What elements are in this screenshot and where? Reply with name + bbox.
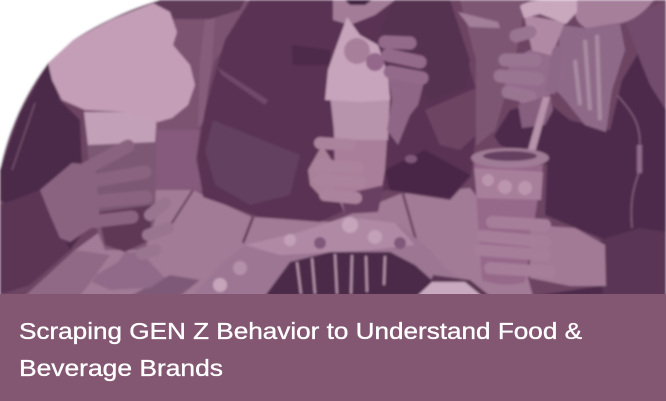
centre hands	[308, 42, 425, 198]
centre person hair and chin	[333, 0, 470, 100]
left milkshake glass	[84, 112, 165, 290]
title panel	[0, 294, 666, 401]
right person hair, neck, face	[556, 0, 666, 132]
white rounded corner mask	[0, 0, 160, 170]
table	[25, 188, 533, 296]
right drink with straw	[471, 97, 550, 285]
photo: friends eating desserts, purple duotone	[0, 0, 666, 296]
cotton candy	[48, 3, 195, 122]
ice cream cone and hand	[500, 0, 577, 128]
title text: Scraping GEN Z Behavior to Understand Food &	[19, 318, 582, 344]
title text	[19, 318, 582, 381]
right person jacket	[494, 50, 666, 296]
left person sleeve	[0, 63, 85, 293]
centre person jacket	[197, 0, 476, 222]
title text: Beverage Brands	[19, 355, 223, 381]
centre drink	[325, 17, 390, 214]
food platter	[195, 217, 490, 296]
right hand	[480, 222, 606, 286]
left hand	[40, 146, 168, 254]
